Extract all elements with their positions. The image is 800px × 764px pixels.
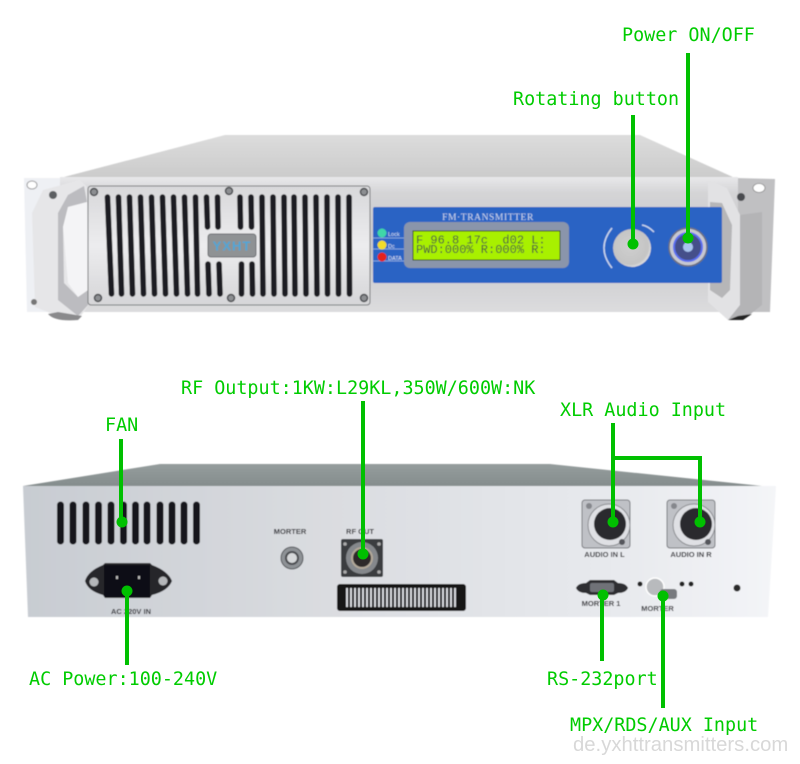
label: AC 220V IN: AC 220V IN xyxy=(111,607,151,616)
RS-232 serial port xyxy=(576,580,628,595)
LCD display: F 96.8 17c d02 L: xyxy=(416,234,546,248)
label: RF OUT: RF OUT xyxy=(346,527,374,536)
front left ear xyxy=(24,178,70,312)
label: AUDIO IN L: AUDIO IN L xyxy=(584,550,625,559)
lower vent grille xyxy=(337,584,466,611)
fan vent slots xyxy=(60,505,196,541)
rear panel xyxy=(23,486,776,617)
BNC connector xyxy=(281,547,303,569)
front top cover xyxy=(64,135,735,178)
label: MORTER 1: MORTER 1 xyxy=(582,599,620,608)
right handle xyxy=(708,180,762,320)
callout: MPX/RDS/AUX Input xyxy=(570,590,758,736)
callout: RS-232port xyxy=(547,590,658,690)
watermark: de.yxhttransmitters.com xyxy=(573,734,788,756)
LCD display: PWD:000% R:000% R: xyxy=(416,243,546,257)
left handle xyxy=(31,180,90,320)
callout: Power ON/OFF: Power ON/OFF xyxy=(622,25,755,46)
YXHT badge: YXHT xyxy=(213,238,251,254)
AC power socket xyxy=(85,563,172,598)
MPX BNC connector xyxy=(638,578,694,599)
LCD display xyxy=(404,222,569,268)
rotary knob xyxy=(604,225,654,268)
label: MORTER left: MORTER xyxy=(274,527,307,536)
callout: FAN xyxy=(105,415,138,528)
rear unit: transmitter xyxy=(23,464,776,617)
callout: Power ON/OFF xyxy=(622,25,755,244)
callout: RF Output xyxy=(181,378,535,560)
callout: Rotating button: Rotating button xyxy=(513,89,679,110)
status indicators: DATA xyxy=(388,256,402,262)
vent plate with slots xyxy=(88,186,370,305)
status indicators xyxy=(373,228,404,262)
vent plate screws xyxy=(90,188,368,302)
XLR connector: audio in R xyxy=(667,500,715,548)
callout: RS-232port: RS-232port xyxy=(547,669,658,690)
callout: XLR Audio Input: XLR Audio Input xyxy=(560,400,726,421)
callout: XLR Audio Input xyxy=(560,400,726,528)
panel title: FM·TRANSMITTER xyxy=(442,213,534,223)
RF output connector xyxy=(341,539,383,577)
blue control panel xyxy=(373,207,722,283)
status indicators: Lock xyxy=(388,232,400,238)
callout: MPX/RDS/AUX Input: MPX/RDS/AUX Input xyxy=(570,715,758,736)
label: AUDIO IN R: AUDIO IN R xyxy=(670,550,712,559)
status indicators: Dc xyxy=(388,244,395,250)
XLR connector: audio in L xyxy=(582,500,630,548)
rear top cover xyxy=(23,464,772,487)
callout: AC Power: AC Power:100-240V xyxy=(29,669,217,690)
callout: FAN: FAN xyxy=(105,415,138,436)
front unit: transmitter xyxy=(24,135,775,320)
indicator hole xyxy=(734,584,740,592)
label: MORTER right: MORTER xyxy=(641,604,674,613)
YXHT badge xyxy=(208,234,256,257)
callout: Rotating button xyxy=(513,89,679,250)
callout: AC Power xyxy=(29,586,217,690)
power button xyxy=(669,228,707,266)
front right ear xyxy=(735,178,775,312)
callout: RF Output: RF Output:1KW:L29KL,350W/600W:NK xyxy=(181,378,535,399)
front faceplate xyxy=(60,177,738,312)
